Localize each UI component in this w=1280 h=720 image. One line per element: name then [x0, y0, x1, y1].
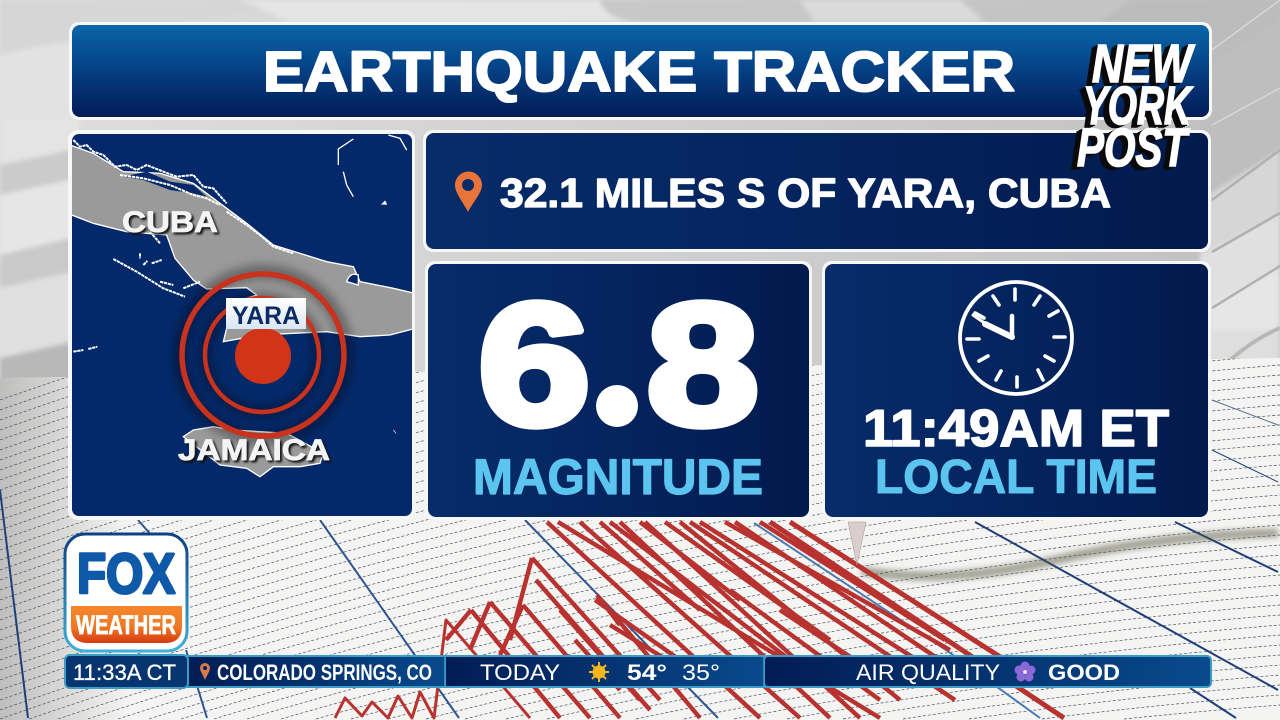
magnitude label: MAGNITUDE	[473, 449, 763, 505]
label: Cuba: CUBA	[122, 206, 218, 239]
time value: 11:49AM ET	[863, 400, 1169, 458]
magnitude value: 6.8	[478, 267, 759, 461]
panel: magnitude	[425, 261, 812, 520]
New York Post logo: YORK	[1083, 76, 1194, 136]
title: EARTHQUAKE TRACKER	[263, 40, 1015, 104]
location text: 32.1 MILES S OF YARA, CUBA	[500, 170, 1111, 216]
logo word: Fox: FOX	[77, 542, 175, 606]
New York Post logo: NEW	[1092, 34, 1195, 94]
ticker bar: 11:33A CT	[73, 660, 176, 685]
panel: time	[822, 261, 1211, 520]
paper grid lines	[0, 400, 1278, 718]
pen shadow	[862, 533, 1278, 576]
air quality cell: GOOD	[1048, 660, 1120, 685]
seismograph trace	[335, 522, 1064, 718]
epicenter rings	[180, 272, 346, 438]
New York Post logo: POST	[1077, 118, 1190, 178]
clock cell	[65, 655, 188, 688]
background: studio swooshes	[0, 0, 1280, 400]
panel: map	[68, 130, 415, 520]
logo badge: Weather	[71, 606, 182, 643]
label: Yara: YARA	[232, 302, 300, 330]
time label: LOCAL TIME	[875, 451, 1157, 504]
forecast cell: 54°	[627, 660, 667, 685]
New York Post logo	[1077, 34, 1195, 178]
icon: flower	[1014, 662, 1036, 682]
forecast cell	[480, 660, 720, 685]
seismograph paper	[0, 358, 1280, 720]
header panel	[69, 22, 1212, 120]
Fox Weather logo: WEATHER	[76, 610, 176, 640]
pen needle	[848, 522, 866, 565]
icon: location pin	[455, 172, 482, 212]
panel: location	[423, 130, 1211, 252]
ticker bar	[65, 655, 1212, 688]
paper ruled lines	[0, 358, 1280, 720]
air quality cell	[856, 660, 1120, 685]
icon: clock	[960, 282, 1072, 394]
icon: sun	[589, 662, 609, 682]
location cell: COLORADO SPRINGS, CO	[217, 660, 432, 685]
forecast cell: TODAY	[480, 660, 560, 685]
Fox Weather logo	[65, 534, 187, 651]
map land and coast	[70, 135, 415, 477]
label: Jamaica: JAMAICA	[178, 434, 330, 467]
forecast cell: 35°	[682, 660, 720, 685]
air quality cell: AIR QUALITY	[856, 660, 1000, 685]
